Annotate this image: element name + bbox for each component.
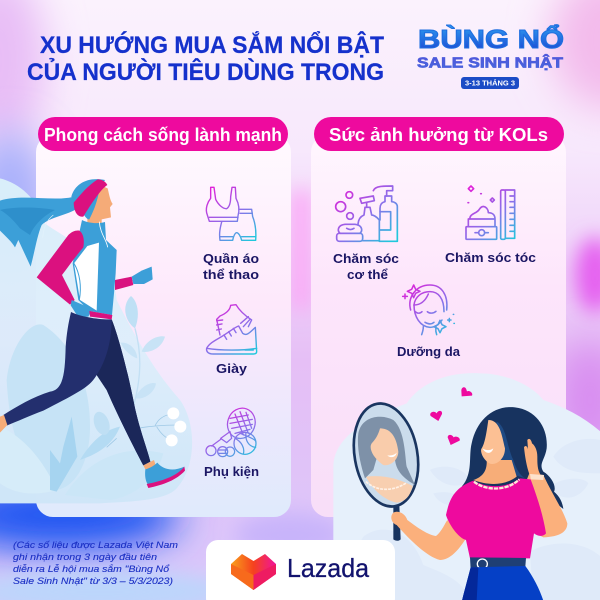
title xyxy=(27,31,384,86)
raised hand xyxy=(524,439,541,475)
illustration: runner xyxy=(0,178,192,503)
campaign logo: BÙNG NỔ xyxy=(418,24,564,54)
footnote xyxy=(13,540,178,587)
earphone cable xyxy=(99,222,108,247)
white vest panel xyxy=(74,243,99,311)
bracelet xyxy=(530,474,544,480)
title: XU HƯỚNG MUA SẮM NỔI BẬT xyxy=(40,31,384,59)
arm holding mirror xyxy=(391,512,465,560)
label: body care: cơ thể xyxy=(347,268,388,282)
hair cap xyxy=(71,179,105,219)
label: body care xyxy=(333,252,399,282)
raised arm xyxy=(527,473,567,537)
headband xyxy=(74,179,107,217)
ankles xyxy=(0,415,157,471)
icon: sports accessories xyxy=(206,404,259,457)
skirt xyxy=(462,566,543,600)
foliage backdrop xyxy=(0,178,192,503)
campaign logo: 3-13 THÁNG 3 xyxy=(465,79,515,88)
hair back xyxy=(462,407,563,509)
mirror xyxy=(346,398,426,541)
magenta arm xyxy=(37,231,84,305)
leaf shapes xyxy=(356,439,600,600)
shoe xyxy=(145,463,184,485)
neck and face xyxy=(473,460,517,484)
pale backdrop xyxy=(333,373,600,600)
belt xyxy=(470,557,526,569)
Lazada logo card xyxy=(206,540,395,600)
leggings xyxy=(3,312,150,465)
icon: Lazada heart xyxy=(231,554,276,590)
face and neck xyxy=(87,183,113,225)
heading: KOL influence xyxy=(314,117,564,151)
footnote: diễn ra Lễ hội mua sắm "Bùng Nổ xyxy=(13,564,170,575)
glove: front hand xyxy=(132,267,153,284)
label: shoes: Giày xyxy=(216,362,247,376)
ponytail xyxy=(0,196,77,267)
shirt xyxy=(446,478,546,558)
label: accessories: Phụ kiện xyxy=(204,465,259,479)
label: sportswear xyxy=(203,252,259,282)
jacket xyxy=(73,220,117,315)
footnote: Sale Sinh Nhật" từ 3/3 – 5/3/2023) xyxy=(13,576,173,587)
glove: hip hand xyxy=(71,300,92,317)
label: body care: Chăm sóc xyxy=(333,252,399,266)
illustration: woman with mirror xyxy=(333,373,600,600)
title: CỦA NGƯỜI TIÊU DÙNG TRONG xyxy=(27,57,384,86)
icon: hair care xyxy=(466,186,515,239)
icon: skincare xyxy=(403,285,454,335)
label: sportswear: Quần áo xyxy=(203,252,259,266)
campaign logo: SALE SINH NHẬT xyxy=(417,54,563,72)
heading: healthy lifestyle: Phong cách sống lành mạnh xyxy=(44,125,282,145)
campaign logo xyxy=(417,24,564,89)
heading: KOL influence: Sức ảnh hưởng từ KOLs xyxy=(329,125,548,145)
label: sportswear: thể thao xyxy=(203,268,259,282)
white berries xyxy=(166,407,186,446)
far arm xyxy=(115,277,133,290)
icon: sportswear xyxy=(206,187,256,240)
waistband xyxy=(89,311,112,319)
panel: KOL influence xyxy=(311,135,566,517)
footnote: ghi nhận trong 3 ngày đầu tiên xyxy=(13,552,157,563)
footnote: (Các số liệu được Lazada Việt Nam xyxy=(13,540,178,551)
icon: shoes xyxy=(207,305,257,354)
label: hair care: Chăm sóc tóc xyxy=(445,251,536,265)
panel: healthy lifestyle xyxy=(36,135,291,517)
icon: body care xyxy=(336,186,397,241)
hearts xyxy=(430,387,472,445)
heading: healthy lifestyle xyxy=(38,117,288,151)
wordmark: Lazada xyxy=(287,553,370,583)
label: skincare: Dưỡng da xyxy=(397,345,461,359)
